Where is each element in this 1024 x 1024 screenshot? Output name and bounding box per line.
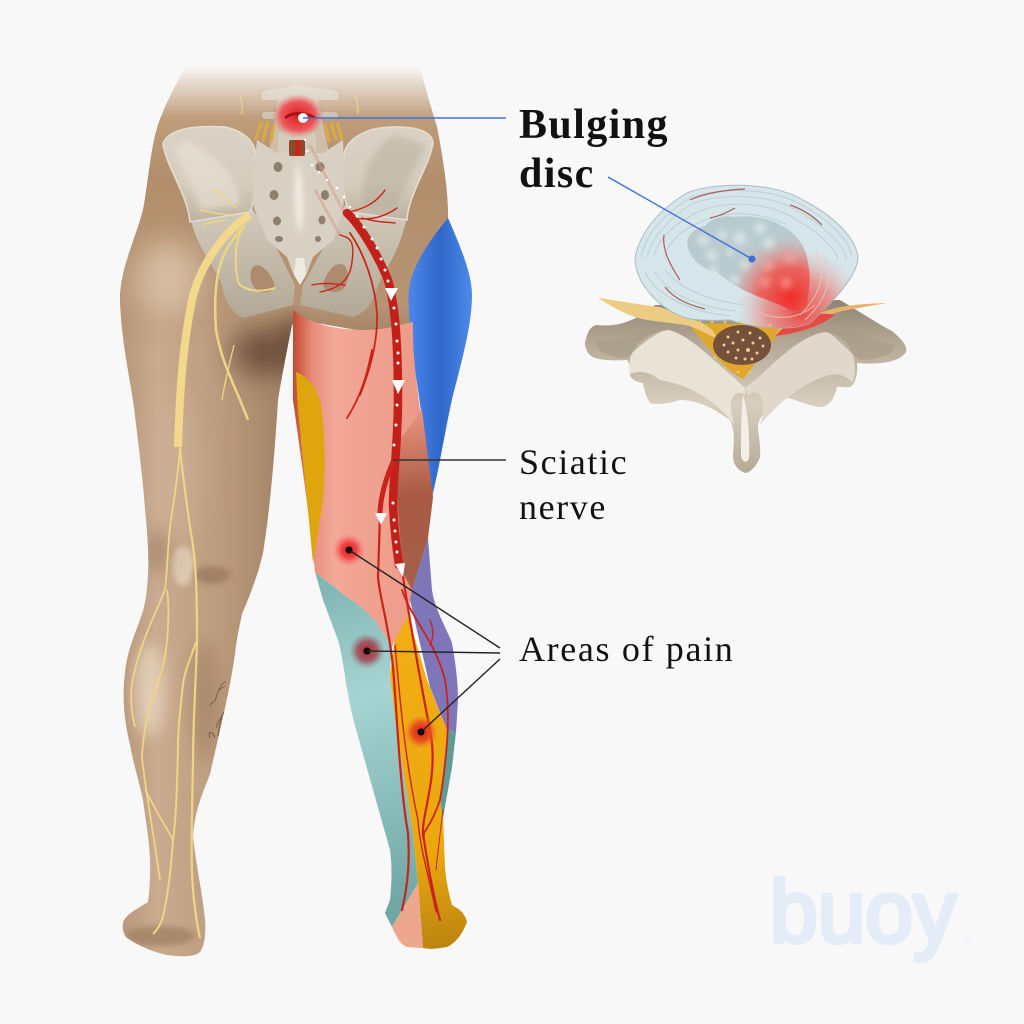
nerve signal dots and arrows	[302, 127, 405, 577]
canal fat dots	[699, 321, 771, 373]
label: sciatic nerve: Sciatic	[519, 442, 628, 482]
blue pain zone	[408, 218, 472, 497]
vertebra bone	[585, 300, 906, 473]
dark red band of thigh	[397, 410, 433, 590]
pain point: back of knee	[349, 633, 385, 669]
logo: buoy: ®	[964, 937, 971, 947]
text: nerve	[519, 487, 607, 527]
spinal canal	[688, 323, 785, 379]
obturator holes	[250, 265, 274, 293]
red sciatic nerves	[312, 190, 448, 920]
leader line: sciatic nerve	[393, 459, 506, 461]
teal pain zone	[315, 572, 418, 927]
left lower pelvis	[190, 205, 295, 318]
sacrum	[253, 140, 344, 283]
purple pain zone	[410, 538, 458, 732]
yellow nerves of the left leg	[131, 190, 275, 938]
spinous process highlight	[741, 395, 749, 462]
heel skin	[392, 883, 423, 948]
illustration: back of the body	[110, 60, 472, 956]
pink thigh zone	[293, 310, 433, 647]
left ilium	[163, 126, 256, 222]
dark teal zone	[440, 730, 456, 818]
logo: buoy: buoy	[770, 862, 956, 961]
disc cross-section illustration	[585, 185, 906, 473]
right lower pelvis	[300, 205, 407, 317]
pelvis bones	[163, 126, 433, 318]
annulus tears	[664, 189, 822, 309]
right ilium	[343, 127, 433, 220]
spinal cord	[713, 325, 771, 365]
right nerve root	[775, 303, 887, 335]
signature	[209, 682, 226, 738]
pain point: calf	[404, 715, 438, 749]
disc body	[635, 185, 858, 328]
leader line: disc cross-section	[608, 177, 756, 262]
text: disc	[519, 151, 595, 197]
pain point: thigh	[332, 533, 366, 567]
spine above pelvis	[240, 84, 358, 158]
left nerve root	[598, 298, 716, 338]
leader lines: areas of pain	[349, 550, 500, 732]
label: areas of pain: Areas of pain	[519, 629, 734, 669]
left leg and hips skin	[110, 60, 460, 956]
leader line: bulging disc on spine	[303, 117, 506, 119]
right lamina	[745, 332, 855, 425]
bulging disc marker on spine	[272, 94, 324, 156]
nucleus	[687, 216, 810, 311]
left lamina	[629, 330, 745, 425]
transverse process shading	[595, 322, 895, 360]
yellow thigh zone	[296, 372, 325, 563]
yellow calf and foot zone	[390, 615, 467, 949]
heading: bulging disc: Bulging	[519, 102, 669, 148]
